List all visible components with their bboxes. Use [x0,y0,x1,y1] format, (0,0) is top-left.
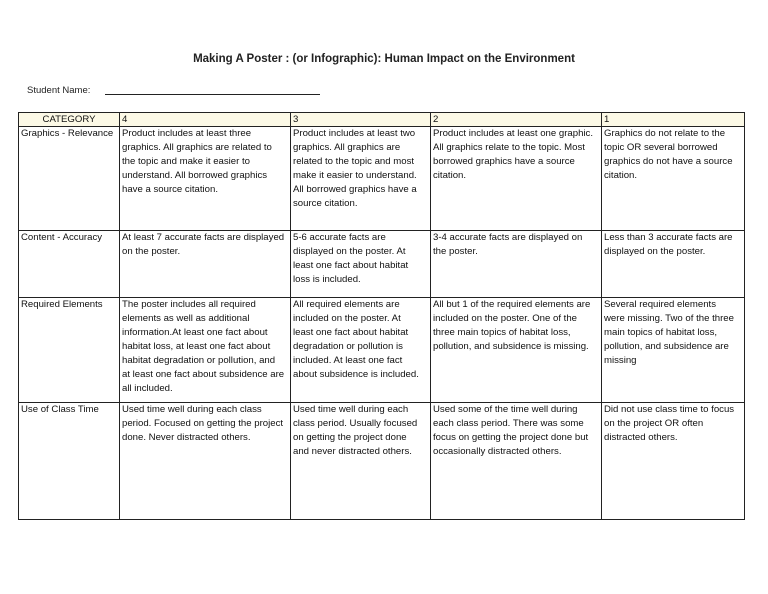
rubric table: focus on getting the project done but [433,432,588,443]
rubric table: Used time well during each [293,404,408,415]
rubric table: degradation or pollution is [293,341,403,352]
rubric table: graphics do not have a source [604,156,733,167]
rubric table: Several required elements [604,299,716,310]
rubric table: Content - Accuracy [21,232,102,243]
rubric table: done. Never distracted others. [122,432,251,443]
rubric table: included. At least one fact [293,355,402,366]
rubric table: habitat degradation or pollution, and [122,355,275,366]
rubric table: All graphics relate to the topic. Most [433,142,585,153]
rubric table: on the poster. [122,246,180,257]
rubric table: about subsidence is included. [293,369,419,380]
rubric table: main topics of habitat loss, [604,327,717,338]
rubric table: displayed on the poster. [604,246,705,257]
rubric table: Did not use class time to focus [604,404,734,415]
rubric table: Product includes at least two [293,128,415,139]
rubric table: CATEGORY [43,114,95,125]
rubric table: occasionally distracted others. [433,446,562,457]
rubric table: Product includes at least one graphic. [433,128,593,139]
rubric table: class period. Usually focused [293,418,417,429]
rubric table: topic OR several borrowed [604,142,718,153]
rubric table: included on the poster. At [293,313,401,324]
rubric table: 1 [604,114,609,125]
rubric table: the topic and make it easier to [122,156,250,167]
rubric table: on the project OR often [604,418,703,429]
rubric table: Product includes at least three [122,128,251,139]
rubric table: 2 [433,114,438,125]
rubric table: least one fact about habitat [293,327,408,338]
rubric table: information.At least one fact about [122,327,268,338]
rubric table: 4 [122,114,127,125]
rubric table: citation. [433,170,466,181]
rubric table: included on the poster. One of the [433,313,577,324]
rubric table: distracted others. [604,432,678,443]
rubric table: Graphics - Relevance [21,128,113,139]
rubric table: 5-6 accurate facts are [293,232,386,243]
rubric table: at least one fact about subsidence are [122,369,284,380]
rubric table: borrowed graphics have a source [433,156,575,167]
rubric table: period. Focused on getting the project [122,418,283,429]
rubric table: Used time well during each class [122,404,262,415]
rubric table: each class period. There was some [433,418,584,429]
rubric table: related to the topic and most [293,156,414,167]
rubric table: make it easier to understand. [293,170,417,181]
rubric table: citation. [604,170,637,181]
rubric table: understand. All borrowed graphics [122,170,267,181]
rubric table: Required Elements [21,299,103,310]
rubric table: source citation. [293,198,358,209]
rubric table: Use of Class Time [21,404,99,415]
rubric table: Graphics do not relate to the [604,128,725,139]
rubric table: habitat loss, at least one fact about [122,341,270,352]
rubric table: least one fact about habitat [293,260,408,271]
rubric table: At least 7 accurate facts are displayed [122,232,284,243]
rubric table: the poster. [433,246,478,257]
rubric table: pollution, and subsidence is missing. [433,341,589,352]
rubric table: All borrowed graphics have a [293,184,417,195]
rubric table: displayed on the poster. At [293,246,406,257]
rubric table: All required elements are [293,299,400,310]
rubric table [18,112,745,520]
rubric table: missing [604,355,637,366]
rubric table: All but 1 of the required elements are [433,299,590,310]
rubric table: graphics. All graphics are [293,142,400,153]
rubric table: Less than 3 accurate facts are [604,232,733,243]
rubric table: three main topics of habitat loss, [433,327,571,338]
rubric table: 3 [293,114,298,125]
title: Making A Poster : (or Infographic): Human Impact on the Environment [193,53,575,65]
rubric table: loss is included. [293,274,361,285]
rubric table: on getting the project done [293,432,407,443]
rubric table: pollution, and subsidence are [604,341,729,352]
rubric table: all included. [122,383,173,394]
rubric table: 3-4 accurate facts are displayed on [433,232,582,243]
rubric table: elements as well as additional [122,313,249,324]
student name field: Student Name: [27,85,90,96]
rubric table: The poster includes all required [122,299,256,310]
rubric table: Used some of the time well during [433,404,578,415]
rubric table: have a source citation. [122,184,218,195]
rubric table: graphics. All graphics are related to [122,142,272,153]
rubric table: were missing. Two of the three [604,313,734,324]
rubric table: and never distracted others. [293,446,412,457]
